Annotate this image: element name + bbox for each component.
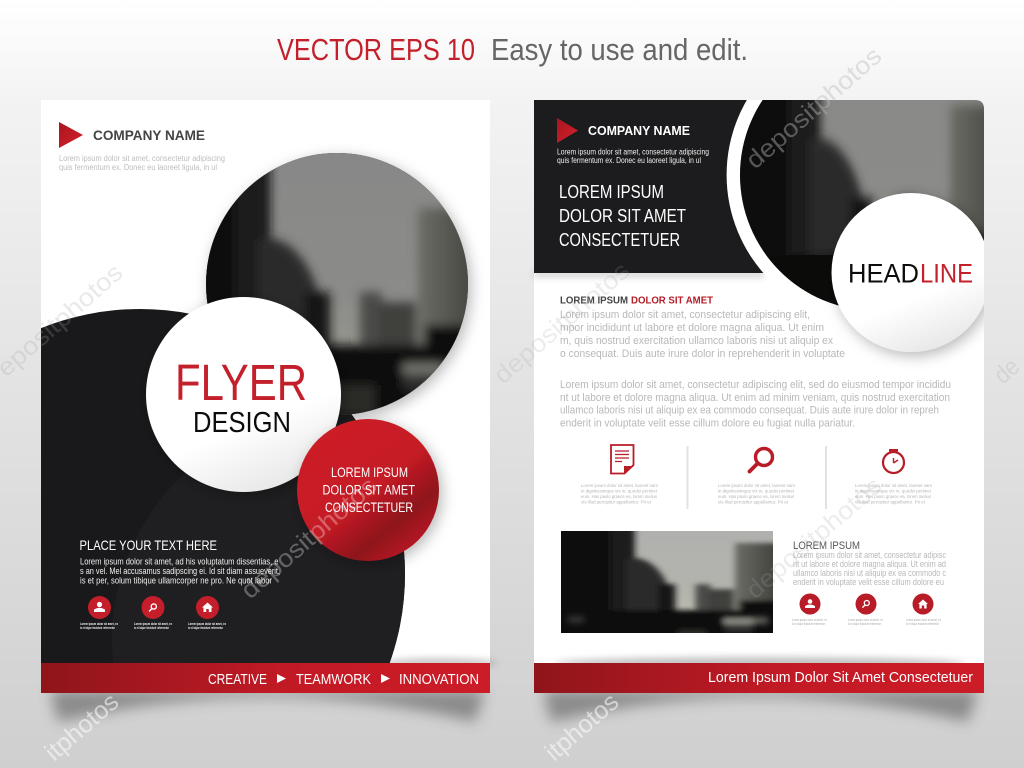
logo: company name: quis fermentum ex. Donec eu laoreet ligula, in ul bbox=[557, 156, 701, 165]
panel: left flyer page bbox=[41, 100, 496, 693]
logo: company name: Lorem ipsum dolor sit amet, consectetur adipiscing bbox=[59, 154, 225, 163]
header text bbox=[559, 182, 686, 250]
text block: body: enderit in voluptate velit esse cillum dolore eu fugiat nulla pariatur. bbox=[560, 418, 855, 430]
text block: intro: LOREM IPSUM bbox=[560, 294, 628, 306]
logo: company name: COMPANY NAME bbox=[588, 123, 690, 138]
text block: lorem ipsum: Lorem ipsum dolor sit amet, consectetur adipisc bbox=[793, 550, 946, 560]
text block: place your text here bbox=[80, 537, 280, 586]
heading: design: DESIGN bbox=[193, 407, 291, 439]
text block: intro: DOLOR SIT AMET bbox=[631, 294, 714, 306]
photo: city rectangle bbox=[561, 531, 773, 633]
icon: person bbox=[80, 596, 118, 630]
text block: body: nt ut labore et dolore magna aliqua. Ut enim ad minim veniam, quis nostrud exercitation bbox=[560, 392, 950, 404]
white circle: flyer design bbox=[146, 297, 341, 492]
title: Easy to use and edit. bbox=[491, 32, 748, 67]
icon: document: eum. Has paulo graece ea, lorem melius bbox=[581, 494, 658, 499]
white circle: headline bbox=[832, 193, 990, 352]
big black circle bbox=[41, 309, 405, 663]
icon: document: in dignitissimque vix in, quodsi pertinet bbox=[581, 488, 658, 494]
icon: stopwatch bbox=[855, 449, 932, 504]
logo: company name: quis fermentum ex. Donec eu laoreet ligula, in ul bbox=[59, 163, 217, 172]
footer band: TEAMWORK bbox=[296, 672, 371, 688]
shadow above footer band bbox=[555, 657, 965, 669]
red circle callout: DOLOR SIT AMET bbox=[322, 482, 415, 498]
dividers bbox=[686, 446, 827, 509]
footer band: Lorem Ipsum Dolor Sit Amet Consectetuer bbox=[708, 670, 973, 686]
logo: company name: Lorem ipsum dolor sit amet, consectetur adipiscing bbox=[557, 148, 709, 156]
icon: home: Lorem ipsum dolor sit amet, ex bbox=[188, 622, 226, 626]
icon: search: Lorem ipsum dolor sit amet, ex bbox=[134, 622, 172, 626]
text block: lorem ipsum: LOREM IPSUM bbox=[793, 540, 860, 552]
icon: magnifier: eum. Has paulo graece ea, lorem melius bbox=[718, 494, 795, 499]
icon: home small: Lorem ipsum dolor sit amet, ex bbox=[906, 618, 941, 622]
text block: intro: mpor incididunt ut labore et dolore magna aliqua. Ut enim bbox=[560, 322, 824, 334]
text block: lorem ipsum: ullamco laboris nisi ut aliquip ex ea commodo c bbox=[793, 568, 946, 578]
icon: search bbox=[134, 596, 172, 630]
text block: place your text here: is et per, solum tibique ullamcorper ne pro. Ne quot labor bbox=[80, 576, 272, 586]
text block: place your text here: s an vel. Mel accusamus sadipscing ei. Id sit diam assueverit, bbox=[80, 566, 280, 577]
logo: company name bbox=[557, 118, 709, 165]
text block: body: ullamco laboris nisi ut aliquip ex ea commodo consequat. Duis aute irure dolor in repreh bbox=[560, 404, 939, 416]
text block: lorem ipsum: nt ut labore et dolore magna aliqua. Ut enim ad bbox=[793, 559, 946, 569]
red circle callout bbox=[297, 419, 439, 561]
text block: body bbox=[560, 379, 951, 430]
watermark: depositphotos bbox=[741, 42, 887, 175]
icon: person small bbox=[792, 594, 827, 626]
icon: magnifier: in dignitissimque vix in, quodsi pertinet bbox=[718, 488, 795, 494]
text block: intro: Lorem ipsum dolor sit amet, consectetur adipiscing elit, bbox=[560, 309, 810, 321]
icon: person small: Lorem ipsum dolor sit amet, ex bbox=[792, 618, 827, 622]
header text: CONSECTETUER bbox=[559, 230, 680, 250]
icon: magnifier: Lorem ipsum dolor sit amet, laoreet nam bbox=[718, 483, 795, 488]
icon: search small: Lorem ipsum dolor sit amet, ex bbox=[848, 618, 883, 622]
watermark: itphotos bbox=[40, 688, 124, 767]
icon: stopwatch: eum. Has paulo graece ea, lorem melius bbox=[855, 494, 932, 499]
text block: intro: o consequat. Duis aute irure dolor in reprehenderit in voluptate bbox=[560, 348, 845, 360]
icon: person: is et idque tincidunt referrentur bbox=[80, 626, 115, 630]
icon: search small bbox=[848, 594, 883, 626]
logo: company name bbox=[59, 122, 225, 172]
icon: search: is et idque tincidunt referrentur bbox=[134, 626, 169, 630]
title bbox=[277, 32, 748, 67]
white ring bbox=[726, 100, 770, 276]
photo circle: city bbox=[740, 100, 984, 306]
white circle: headline: LINE bbox=[920, 258, 973, 288]
watermark: depositphotos bbox=[741, 472, 887, 605]
icon: document: vis illud percipitur appellantur. Pri et bbox=[581, 500, 652, 504]
watermark: depositphotos bbox=[489, 257, 635, 390]
icon: home small bbox=[906, 594, 941, 626]
text block: body: Lorem ipsum dolor sit amet, consectetur adipiscing elit, sed do eiusmod tempor incididu bbox=[560, 379, 951, 391]
icon: stopwatch: in dignitissimque vix in, quodsi pertinet bbox=[855, 488, 932, 494]
shadow above footer band bbox=[382, 658, 498, 668]
logo: company name: COMPANY NAME bbox=[93, 127, 205, 143]
text block: place your text here: Lorem ipsum dolor sit amet, ad his voluptatum dissentias, e bbox=[80, 556, 278, 568]
footer band bbox=[41, 663, 490, 693]
red circle callout: LOREM IPSUM bbox=[331, 464, 408, 480]
icon: document: Lorem ipsum dolor sit amet, laoreet nam bbox=[581, 483, 658, 488]
heading: headline: HEAD bbox=[848, 258, 919, 288]
icon: stopwatch: vis illud percipitur appellantur. Pri et bbox=[855, 500, 926, 504]
text block: intro: m, quis nostrud exercitation ullamco laboris nisi ut aliquip ex bbox=[560, 335, 833, 347]
icon: document bbox=[581, 445, 658, 504]
footer band bbox=[534, 663, 984, 693]
panel: right flyer page bbox=[532, 100, 984, 693]
title: VECTOR EPS 10 bbox=[277, 32, 475, 67]
icon: person small: is et idque tincidunt referrentur bbox=[792, 622, 826, 626]
icon: home small: is et idque tincidunt referrentur bbox=[906, 622, 940, 626]
icon: home bbox=[188, 596, 226, 630]
icon: person: Lorem ipsum dolor sit amet, ex bbox=[80, 622, 118, 626]
header text: LOREM IPSUM bbox=[559, 182, 664, 202]
footer band: INNOVATION bbox=[399, 672, 479, 688]
icon: magnifier bbox=[718, 448, 795, 504]
watermark: depositphotos bbox=[236, 472, 382, 605]
text block: place your text here: PLACE YOUR TEXT HERE bbox=[80, 537, 217, 553]
header text: DOLOR SIT AMET bbox=[559, 206, 686, 226]
icon: search small: is et idque tincidunt referrentur bbox=[848, 622, 882, 626]
icon: magnifier: vis illud percipitur appellantur. Pri et bbox=[718, 500, 789, 504]
red circle callout: CONSECTETUER bbox=[325, 499, 413, 515]
footer band: CREATIVE bbox=[208, 672, 267, 688]
text block: lorem ipsum: enderit in voluptate velit esse cillum dolore eu bbox=[793, 577, 944, 587]
heading: flyer: FLYER bbox=[175, 354, 307, 411]
icon: home: is et idque tincidunt referrentur bbox=[188, 626, 223, 630]
text block: lorem ipsum bbox=[793, 540, 946, 587]
photo circle: city bbox=[201, 149, 479, 420]
watermark: itphotos bbox=[540, 688, 624, 767]
icon: stopwatch: Lorem ipsum dolor sit amet, laoreet nam bbox=[855, 483, 932, 488]
header band bbox=[534, 100, 770, 273]
text block: intro bbox=[560, 294, 845, 360]
shadow below header bbox=[534, 271, 764, 277]
shadows under pages bbox=[50, 690, 978, 722]
